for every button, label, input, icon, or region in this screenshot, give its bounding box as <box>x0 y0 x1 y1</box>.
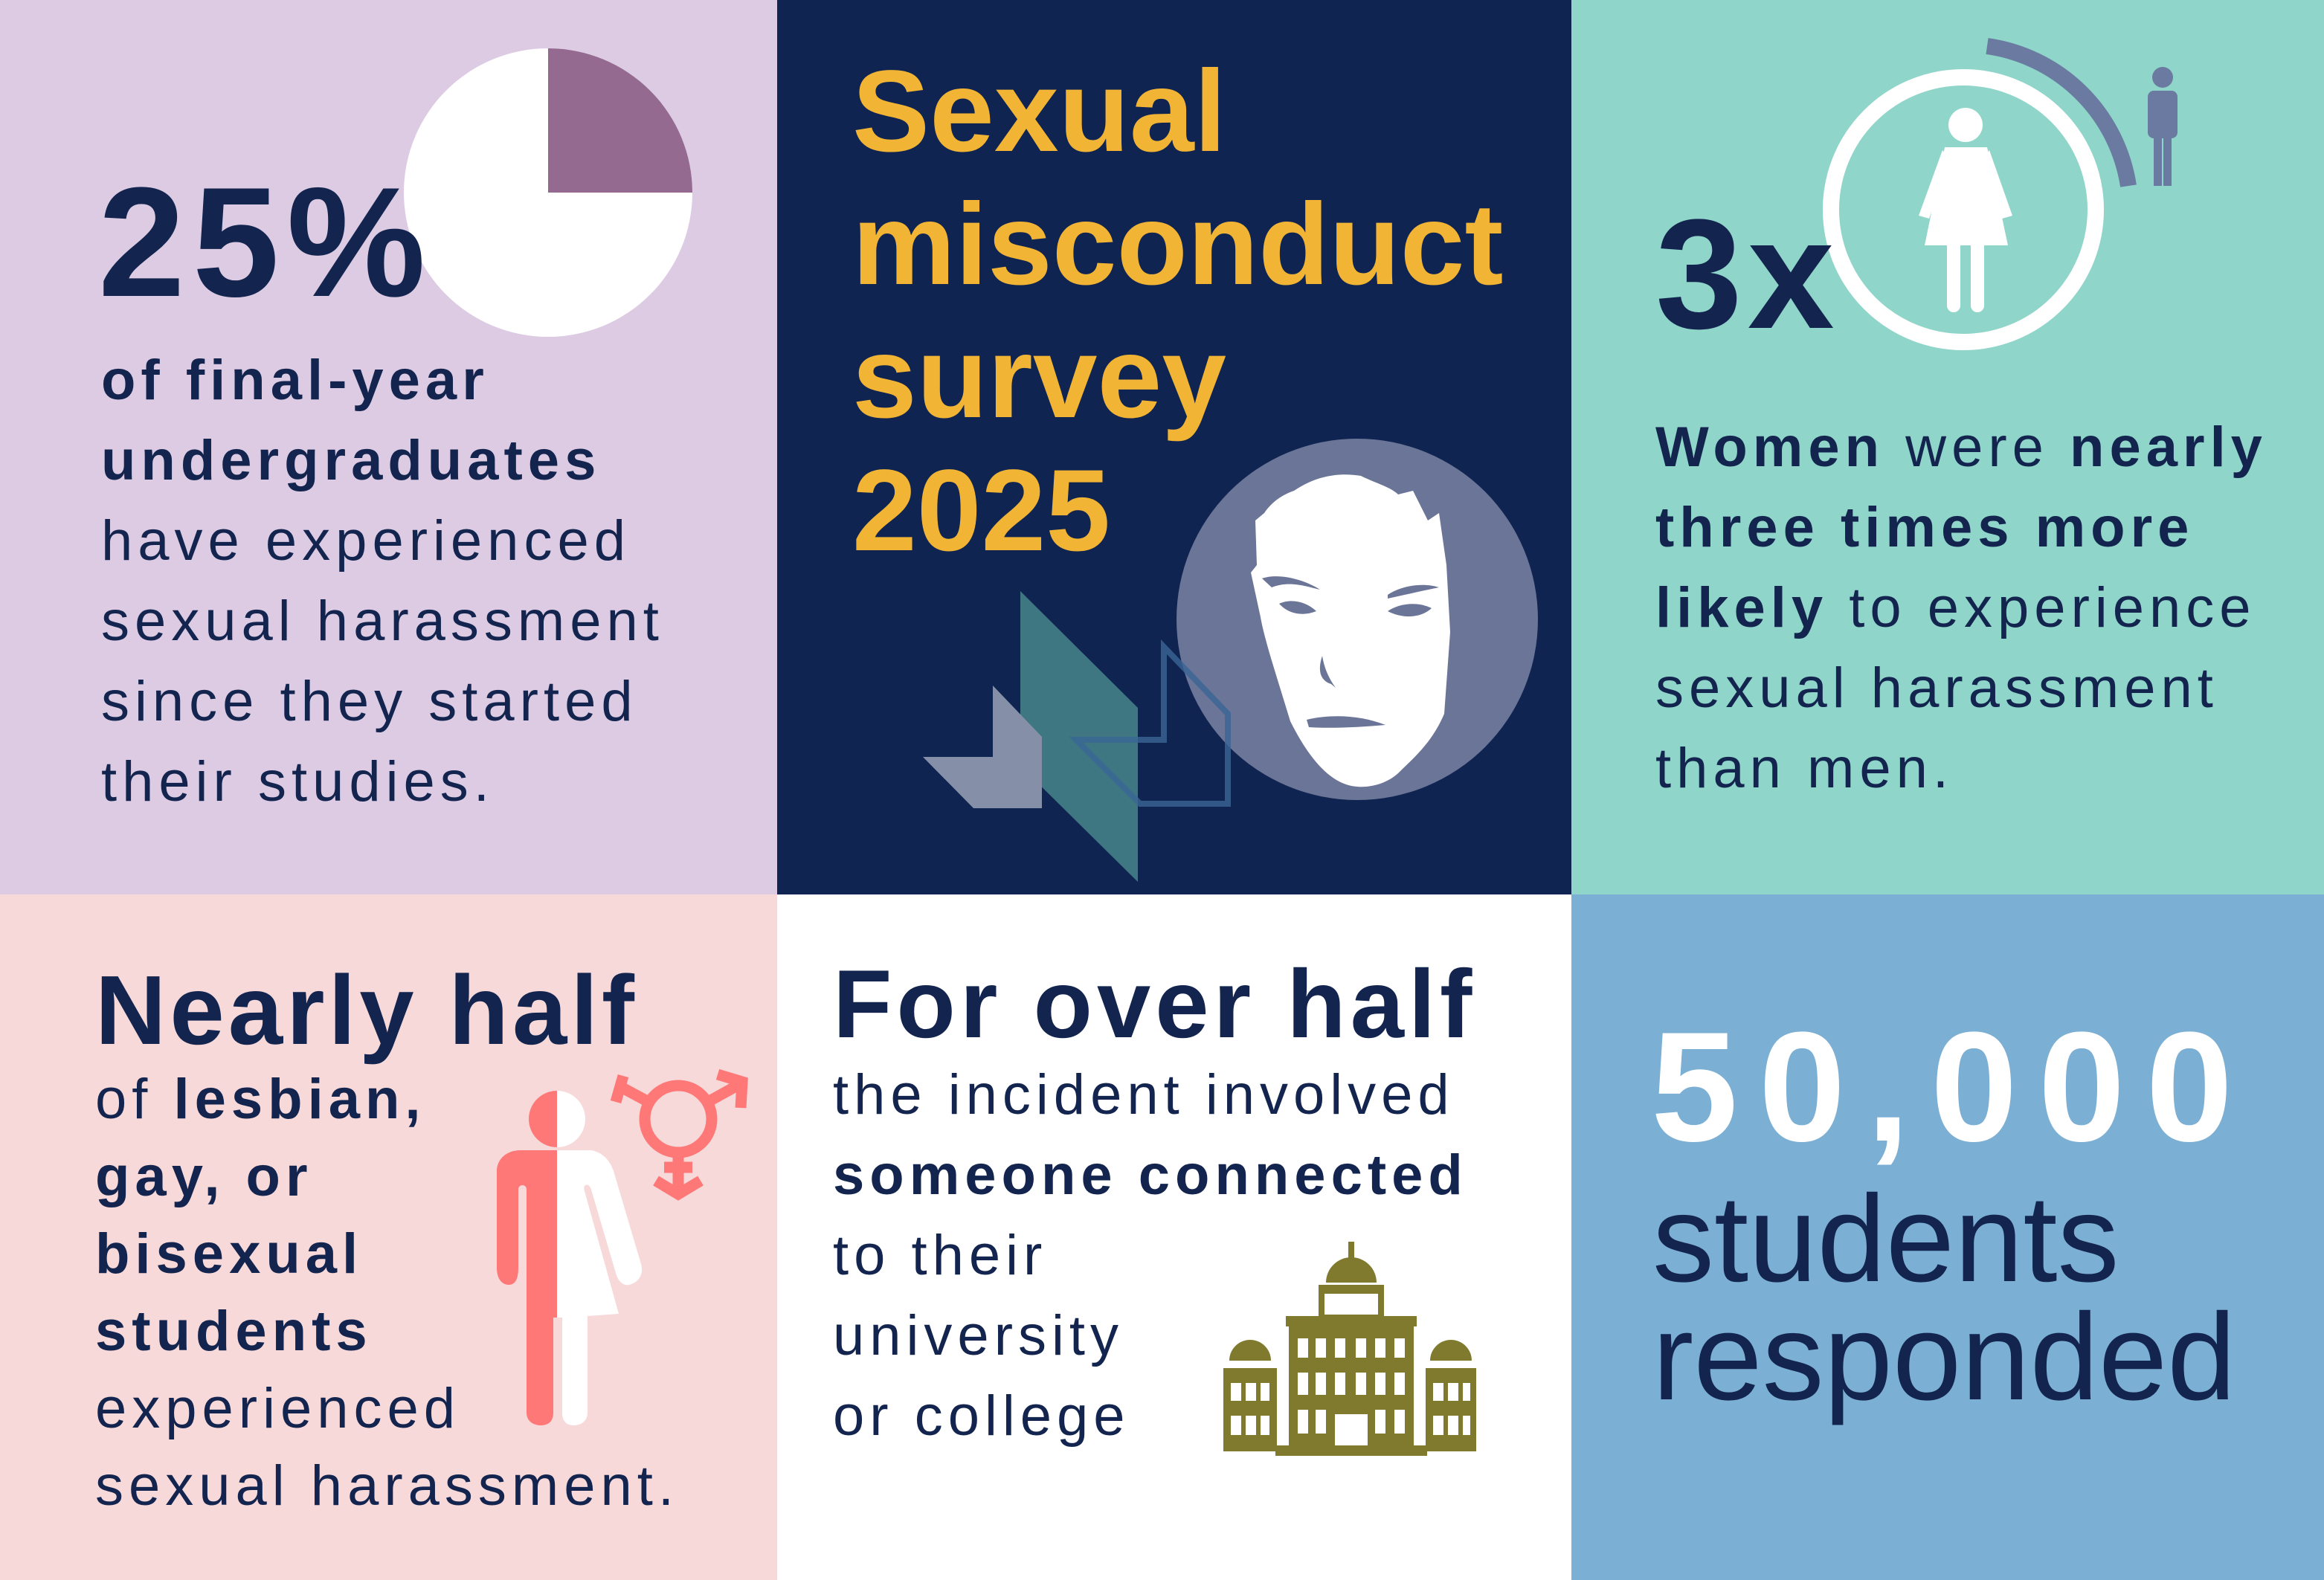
heading: For over half <box>833 949 1476 1058</box>
text block: Women were nearly <box>1655 416 2267 479</box>
text block: sexual harassment <box>101 590 664 653</box>
stat 3x: 3x <box>1655 187 1840 361</box>
text block: students <box>95 1300 373 1363</box>
icon: university building <box>1223 1242 1476 1456</box>
icon: gender figure and transgender symbol <box>497 1069 748 1425</box>
icon: ring with woman and man <box>1823 38 2177 350</box>
title: 2025 <box>852 446 1110 575</box>
panel: 25% lavender <box>0 0 777 894</box>
text block <box>1655 416 2267 800</box>
text block: sexual harassment <box>1655 657 2218 720</box>
text block: undergraduates <box>101 429 601 492</box>
text block: have experienced <box>101 509 631 573</box>
text block: someone connected <box>833 1144 1468 1207</box>
panel: 3x mint <box>1571 0 2324 894</box>
panel: nearly half pink <box>0 894 777 1580</box>
text block: than men. <box>1655 737 1954 800</box>
text block: three times more <box>1655 496 2194 559</box>
decorative geometric shapes and face <box>923 439 1538 882</box>
title: survey <box>852 313 1226 442</box>
shape: teal parallelogram <box>1020 591 1138 882</box>
text block <box>101 349 664 813</box>
text block: likely to experience <box>1655 576 2256 639</box>
text block: university <box>833 1304 1124 1367</box>
icon: face circle <box>1177 439 1538 800</box>
text block: to their <box>833 1224 1047 1287</box>
stat 25%: 25% <box>98 155 433 329</box>
pie chart <box>404 48 692 337</box>
text block: or college <box>833 1384 1130 1448</box>
text block: of final-year <box>101 349 489 412</box>
text block: responded <box>1652 1289 2236 1426</box>
text block: students <box>1652 1170 2119 1308</box>
text block: their studies. <box>101 750 495 813</box>
text block: since they started <box>101 670 638 733</box>
text block <box>833 1063 1468 1448</box>
title: Sexual <box>852 47 1226 176</box>
stat 50,000: 50,000 <box>1651 999 2253 1174</box>
text block: bisexual <box>95 1222 363 1286</box>
heading: Nearly half <box>95 955 638 1065</box>
title: misconduct <box>852 180 1503 309</box>
text block <box>1652 1170 2236 1426</box>
text block: the incident involved <box>833 1063 1455 1126</box>
panel: title navy <box>777 0 1571 894</box>
text block: gay, or <box>95 1145 313 1208</box>
panel: over half white <box>777 894 1571 1580</box>
text block: of lesbian, <box>95 1068 425 1131</box>
panel: 50,000 blue <box>1571 894 2324 1580</box>
title <box>852 47 1503 575</box>
text block <box>95 1068 679 1518</box>
text block: experienced <box>95 1377 460 1440</box>
shape: blue outline arrow <box>1076 647 1228 804</box>
text block: sexual harassment. <box>95 1454 679 1518</box>
shape: grey arrow <box>923 686 1042 808</box>
